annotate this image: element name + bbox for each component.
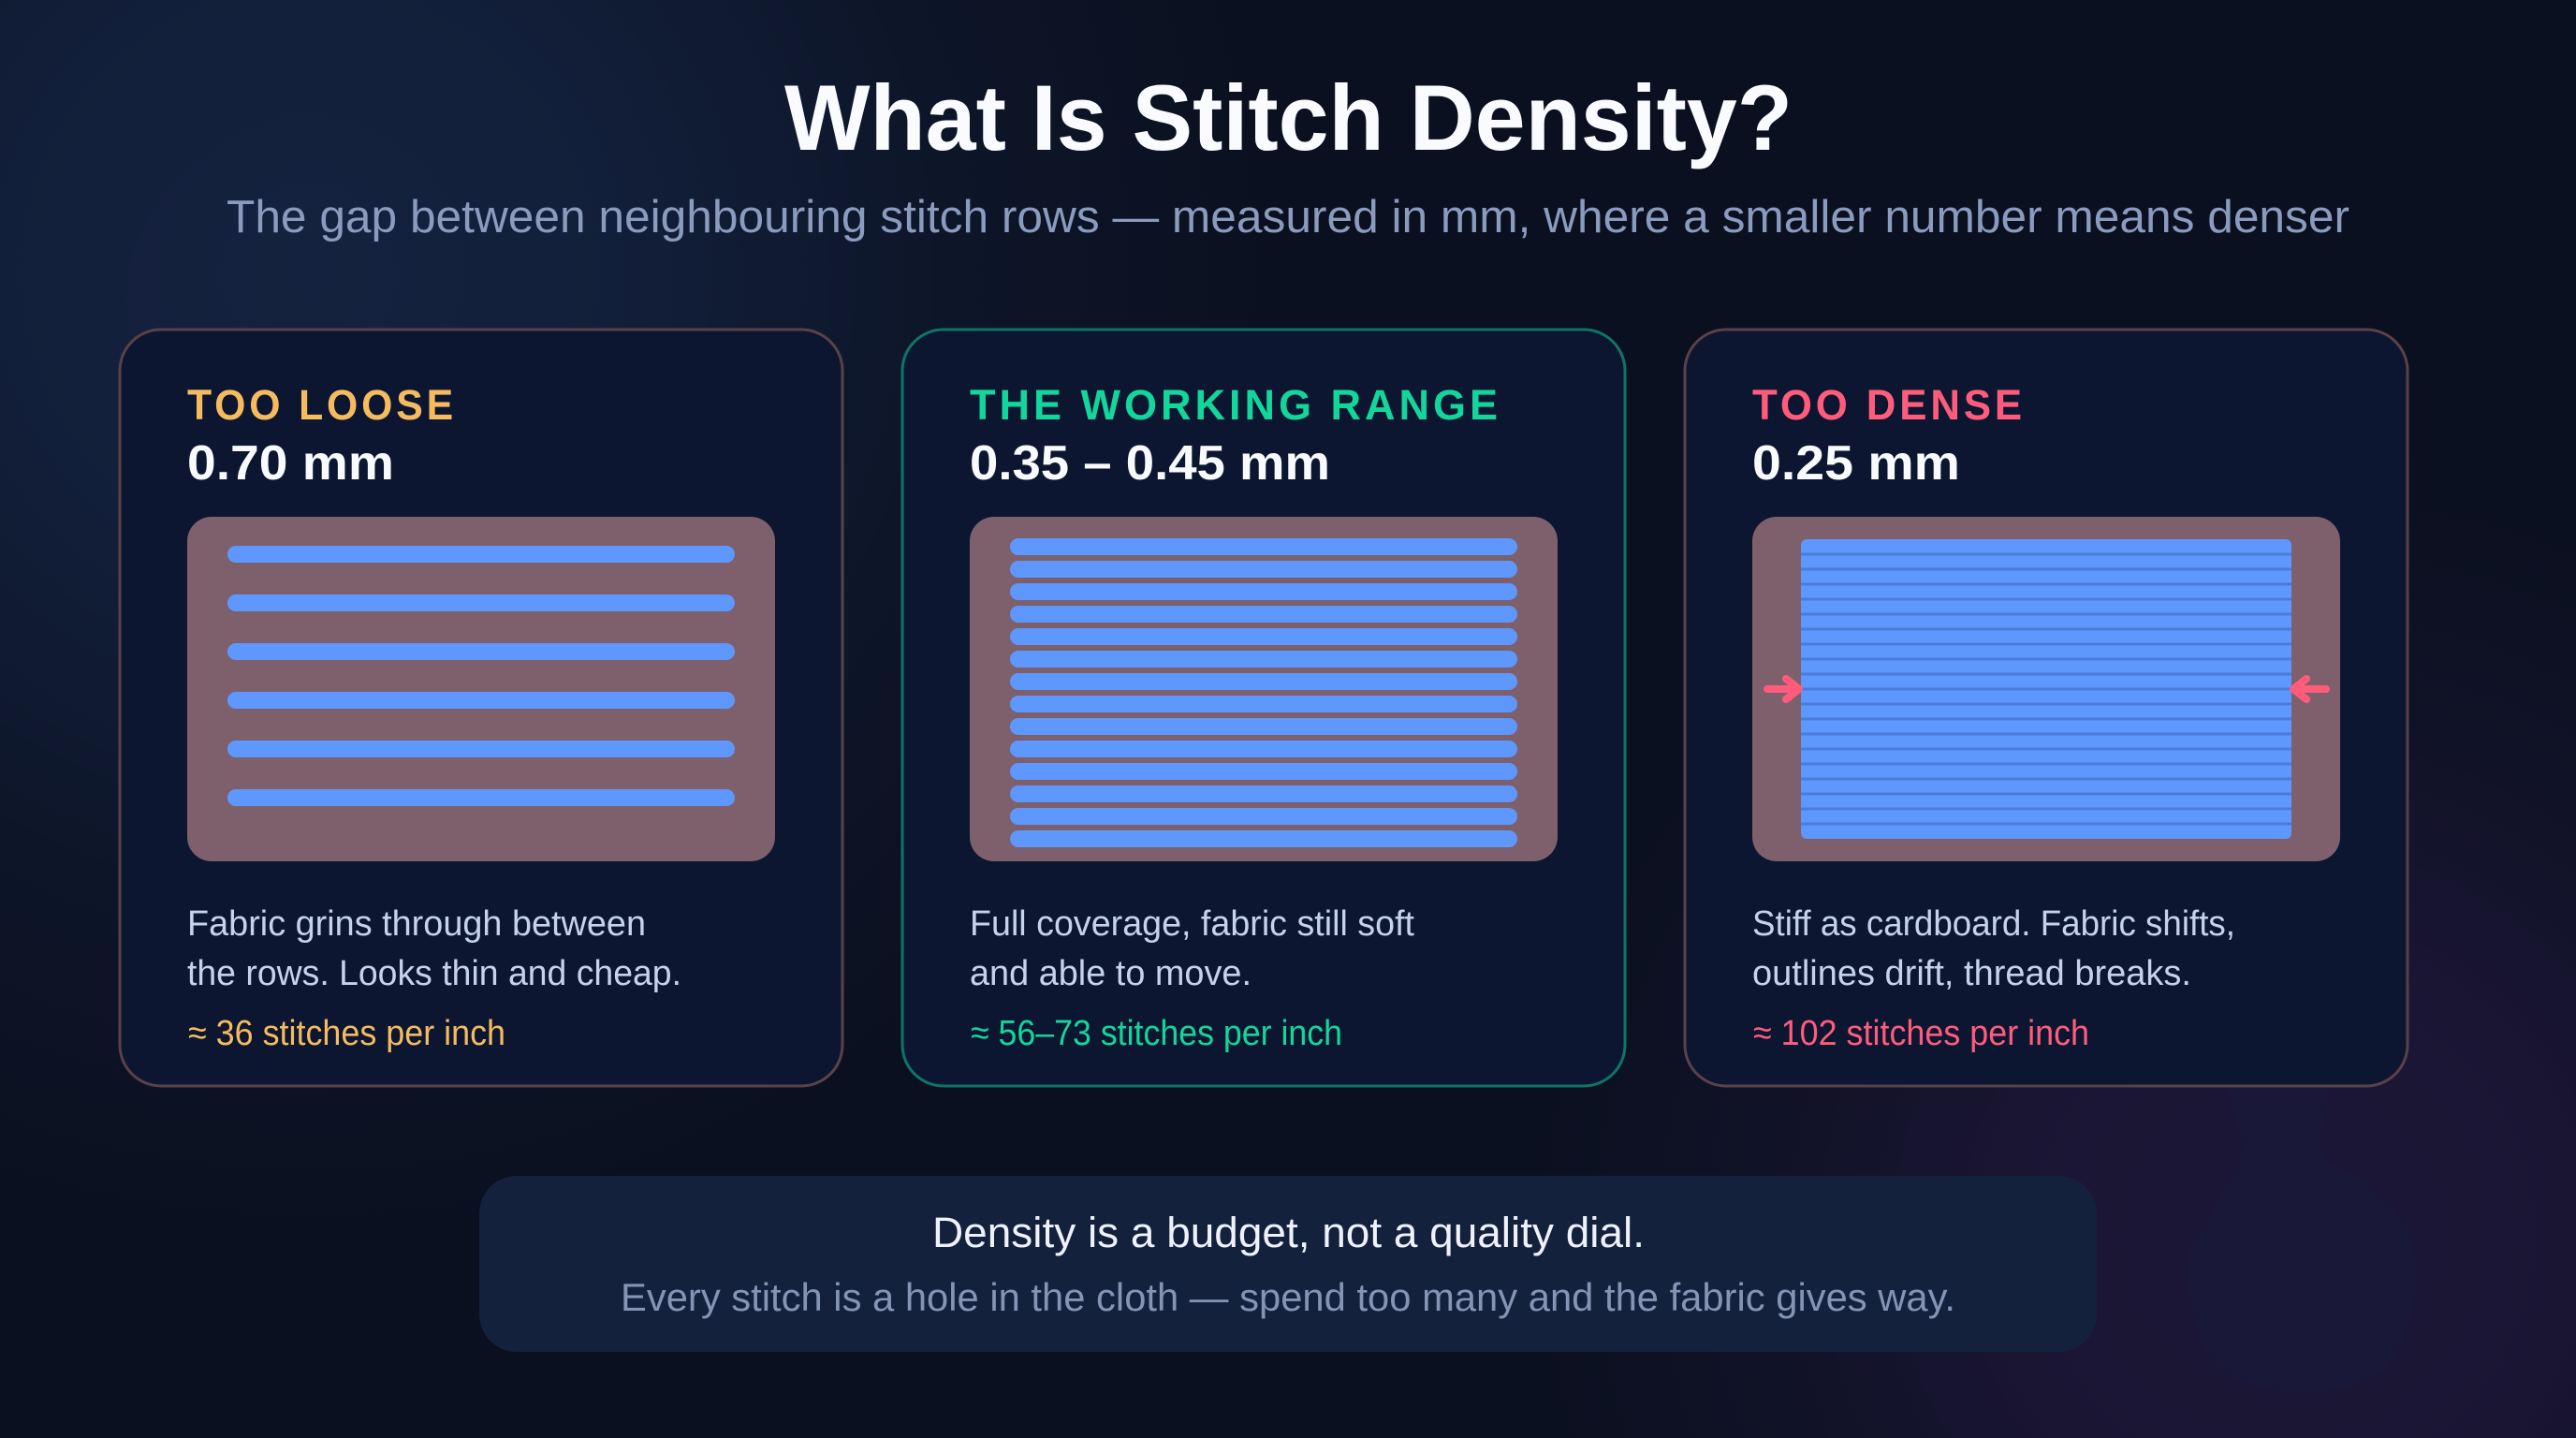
description [187,904,681,993]
arrow: squeeze from right [2293,679,2326,699]
value: 0.70 mm [187,436,394,491]
label: TOO DENSE [1752,381,2026,429]
card background [1685,330,2408,1086]
description: the rows. Looks thin and cheap. [187,954,681,993]
value: 0.25 mm [1752,436,1960,491]
panel: too loose [120,330,842,1086]
panel: the working range [902,330,1625,1086]
description: outlines drift, thread breaks. [1752,954,2191,993]
panel: too dense [1685,330,2408,1086]
title: What Is Stitch Density? [784,66,1793,169]
stitches per inch: ≈ 56–73 stitches per inch [971,1014,1342,1053]
stitches per inch: ≈ 36 stitches per inch [188,1014,505,1053]
description [1752,904,2235,993]
fabric swatch with even stitches [970,517,1558,861]
description: and able to move. [970,954,1251,993]
description: Fabric grins through between [187,904,646,944]
description [970,904,1414,993]
value: 0.35 – 0.45 mm [970,436,1330,491]
card background [902,330,1625,1086]
callout headline: Density is a budget, not a quality dial. [932,1209,1645,1256]
stitches per inch: ≈ 102 stitches per inch [1753,1014,2089,1053]
fabric swatch with sparse stitches [187,517,775,861]
fabric swatch with packed stitches [1752,517,2340,861]
callout background [479,1176,2097,1352]
label: THE WORKING RANGE [970,381,1501,429]
description: Stiff as cardboard. Fabric shifts, [1752,904,2235,944]
callout [479,1176,2097,1352]
arrow: squeeze from left [1767,679,1799,699]
callout detail: Every stitch is a hole in the cloth — spend too many and the fabric gives way. [621,1275,1955,1319]
card background [120,330,842,1086]
label: TOO LOOSE [187,381,457,429]
subtitle: The gap between neighbouring stitch rows — measured in mm, where a smaller number means denser [227,192,2349,242]
description: Full coverage, fabric still soft [970,904,1414,944]
